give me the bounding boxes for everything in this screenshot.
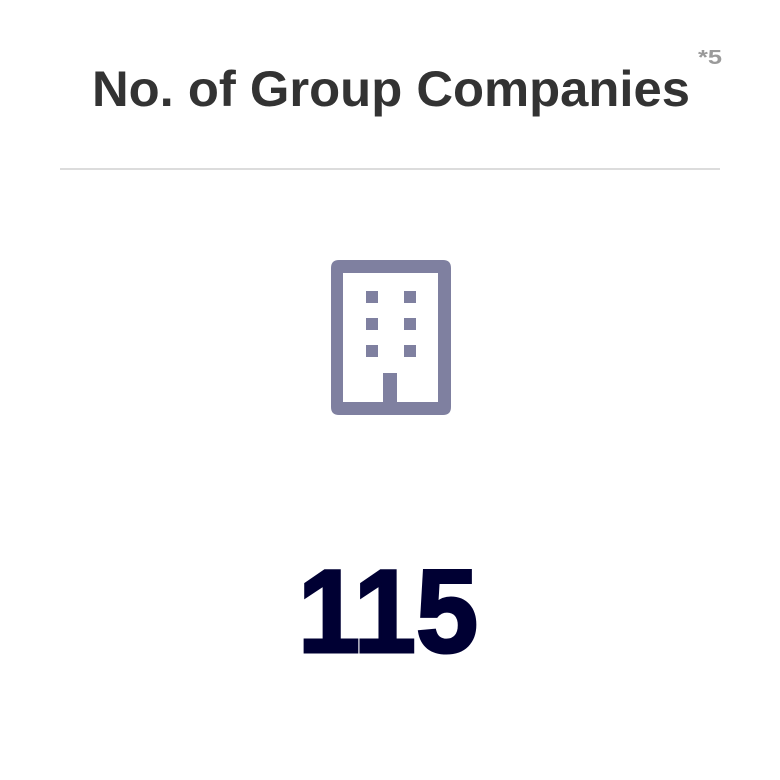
footnote marker: *5 (698, 47, 722, 69)
icon: building (331, 260, 451, 415)
number: 115: 115 (298, 546, 478, 678)
title: No. of Group Companies (92, 61, 690, 117)
